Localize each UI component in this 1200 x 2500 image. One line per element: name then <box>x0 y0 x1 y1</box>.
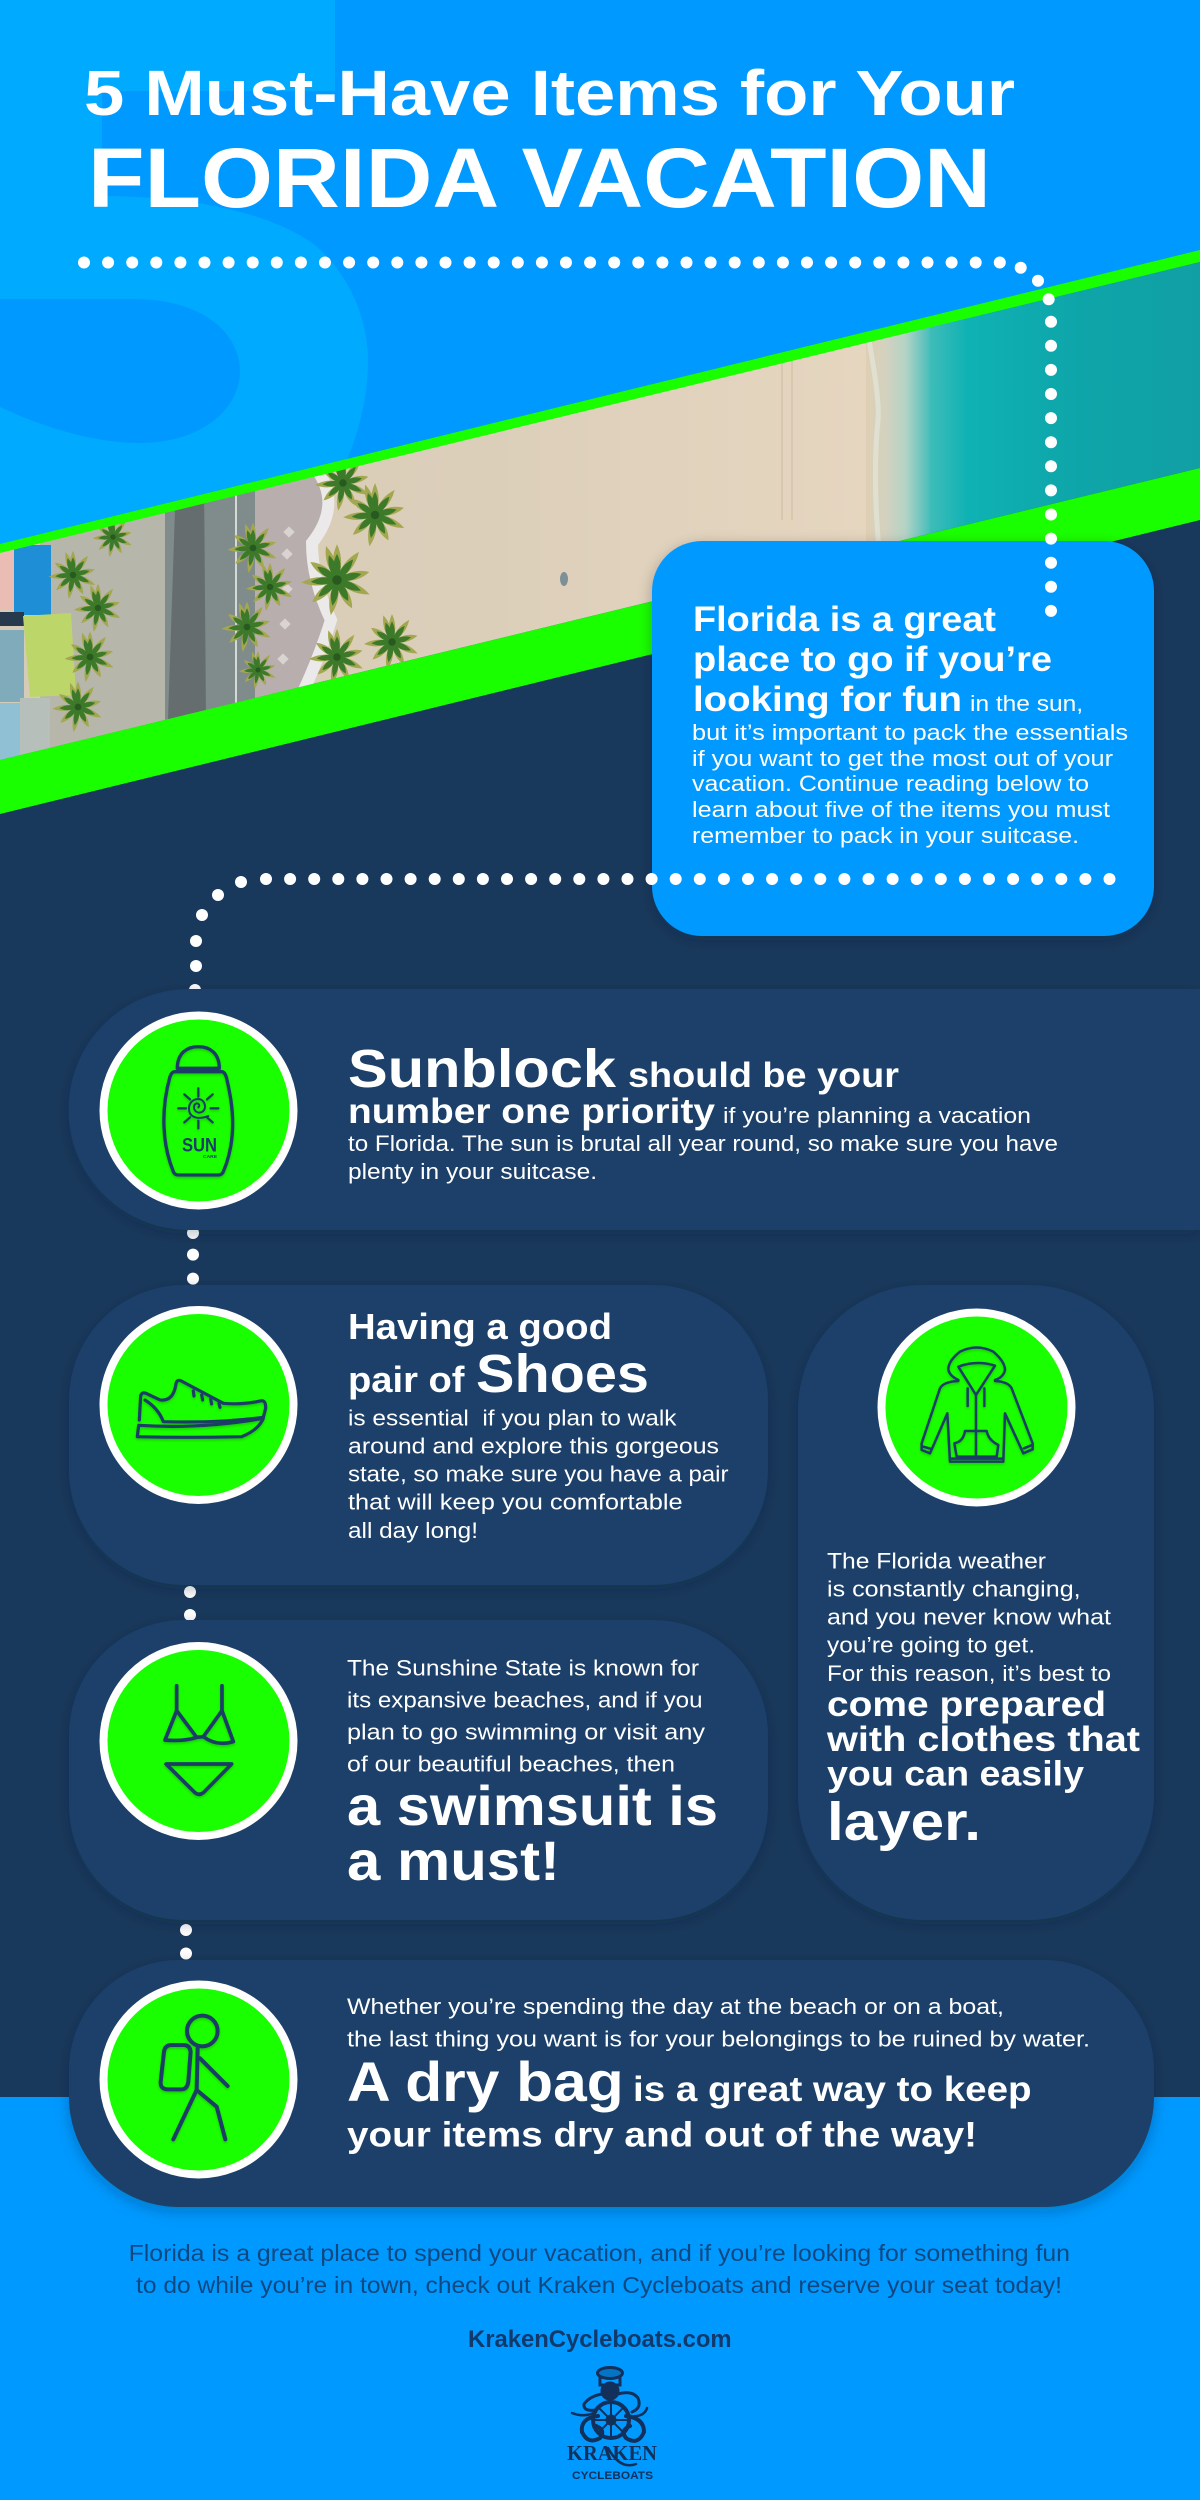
panel: swimsuit <box>69 1620 768 1920</box>
sunblock text: number one priority <box>348 1092 716 1131</box>
shoes text: pair of <box>348 1359 466 1400</box>
surf foam <box>868 335 880 560</box>
sunblock text: should be your <box>628 1056 899 1095</box>
swimsuit text: a swimsuit is <box>347 1774 718 1837</box>
website link text: KrakenCycleboats.com <box>468 2326 732 2353</box>
panel: sunblock <box>68 989 1200 1230</box>
icon: hiker with backpack <box>104 1984 294 2174</box>
icon: shoe <box>104 1310 294 1500</box>
panel: dry bag <box>69 1960 1154 2207</box>
dotted path: title to intro <box>84 262 1055 612</box>
promenade diamonds <box>277 526 295 665</box>
road markings <box>235 480 237 705</box>
sidewalk <box>40 513 165 750</box>
icon: sunblock bottle <box>104 1016 294 1206</box>
panel: shoes <box>69 1285 768 1585</box>
shoes text: Having a good <box>348 1306 612 1347</box>
intro heading text: place to go if you’re <box>693 640 1052 679</box>
logo: Kraken Cycleboats <box>567 2368 657 2482</box>
dry bag text: is a great way to keep <box>633 2070 1032 2109</box>
clothes text <box>826 1548 1140 1852</box>
logo: Kraken Cycleboats: KRAKEN <box>567 2441 657 2465</box>
icon: hooded jacket <box>882 1312 1072 1502</box>
panel: intro callout <box>652 541 1154 936</box>
promenade <box>255 476 324 698</box>
decorative large numeral 5 <box>0 0 368 556</box>
clothes text: is constantly changing, <box>827 1576 1081 1601</box>
dry bag text: your items dry and out of the way! <box>347 2116 977 2154</box>
shoes text: Shoes <box>476 1344 649 1404</box>
closing text: to do while you’re in town, check out Kraken Cycleboats and reserve your seat today! <box>136 2272 1062 2298</box>
beach aerial photo band <box>0 240 1200 780</box>
sunblock text: to Florida. The sun is brutal all year round, so make sure you have <box>348 1131 1058 1156</box>
swimsuit text: plan to go swimming or visit any <box>347 1719 705 1744</box>
title <box>84 57 1015 225</box>
shoes text: around and explore this gorgeous <box>348 1434 719 1458</box>
closing text <box>129 2240 1070 2298</box>
swimsuit text: The Sunshine State is known for <box>347 1656 699 1680</box>
shoes text: state, so make sure you have a pair <box>348 1462 728 1487</box>
title: 5 Must-Have Items for Your <box>84 57 1015 129</box>
clothes text: you’re going to get. <box>827 1632 1035 1658</box>
swimsuit text: a must! <box>347 1829 560 1892</box>
dry bag text: A dry bag <box>347 2050 624 2113</box>
dry bag text: the last thing you want is for your belongings to be ruined by water. <box>347 2027 1090 2052</box>
clothes text: The Florida weather <box>827 1548 1046 1573</box>
person on the beach <box>560 572 568 586</box>
sunblock text: Sunblock <box>348 1039 617 1099</box>
header background: bright blue <box>0 0 1200 560</box>
intro body text: but it’s important to pack the essentials <box>692 720 1128 745</box>
closing text: Florida is a great place to spend your vacation, and if you’re looking for something fun <box>129 2240 1070 2266</box>
intro heading text: Florida is a great <box>693 600 996 639</box>
palm trees <box>92 522 132 557</box>
sand <box>0 340 879 760</box>
intro heading text: in the sun, <box>970 691 1083 716</box>
shoes text: is essential if you plan to walk <box>348 1406 678 1430</box>
lower green band <box>0 468 1200 814</box>
clothes text: you can easily <box>827 1754 1085 1794</box>
panel: layered clothes <box>798 1285 1154 1920</box>
clothes text: and you never know what <box>827 1604 1111 1630</box>
dotted path: intro to items <box>180 876 1112 1960</box>
sunblock text: plenty in your suitcase. <box>348 1159 597 1184</box>
sunblock text: if you’re planning a vacation <box>723 1103 1031 1128</box>
white curb <box>304 470 331 690</box>
intro body text: vacation. Continue reading below to <box>692 771 1089 796</box>
shoes text: all day long! <box>348 1518 478 1543</box>
clothes text: layer. <box>827 1792 981 1852</box>
logo: Kraken Cycleboats: CYCLEBOATS <box>572 2470 653 2482</box>
tire tracks <box>782 340 792 520</box>
shoes text <box>348 1306 728 1543</box>
clothes text: come prepared <box>827 1685 1106 1724</box>
intro body text: remember to pack in your suitcase. <box>692 823 1079 848</box>
footer blue background <box>0 2097 1200 2500</box>
road <box>165 491 255 720</box>
dry bag text <box>347 1994 1090 2154</box>
intro body text <box>692 720 1128 848</box>
intro heading text: looking for fun <box>693 680 962 719</box>
icon: sunblock bottle: SUN <box>182 1136 217 1157</box>
ocean <box>931 262 1200 534</box>
clothes text: with clothes that <box>826 1720 1140 1759</box>
dry bag text: Whether you’re spending the day at the beach or on a boat, <box>347 1994 1004 2019</box>
icon: sunblock bottle: CARE <box>203 1154 217 1159</box>
swimsuit text: its expansive beaches, and if you <box>347 1688 702 1712</box>
wet shoreline <box>866 328 932 541</box>
intro body text: if you want to get the most out of your <box>692 746 1113 771</box>
intro body text: learn about five of the items you must <box>692 797 1110 822</box>
dark road lane <box>168 504 206 719</box>
buildings <box>0 550 14 610</box>
intro heading text <box>693 600 1083 719</box>
icon: bikini <box>104 1646 294 1836</box>
upper green band <box>0 250 1200 553</box>
sunblock text <box>348 1039 1058 1184</box>
title: FLORIDA VACATION <box>88 131 991 225</box>
swimsuit text <box>347 1656 718 1892</box>
clothes text: For this reason, it’s best to <box>827 1661 1111 1686</box>
swimsuit text: of our beautiful beaches, then <box>347 1751 675 1776</box>
shoes text: that will keep you comfortable <box>348 1490 683 1515</box>
